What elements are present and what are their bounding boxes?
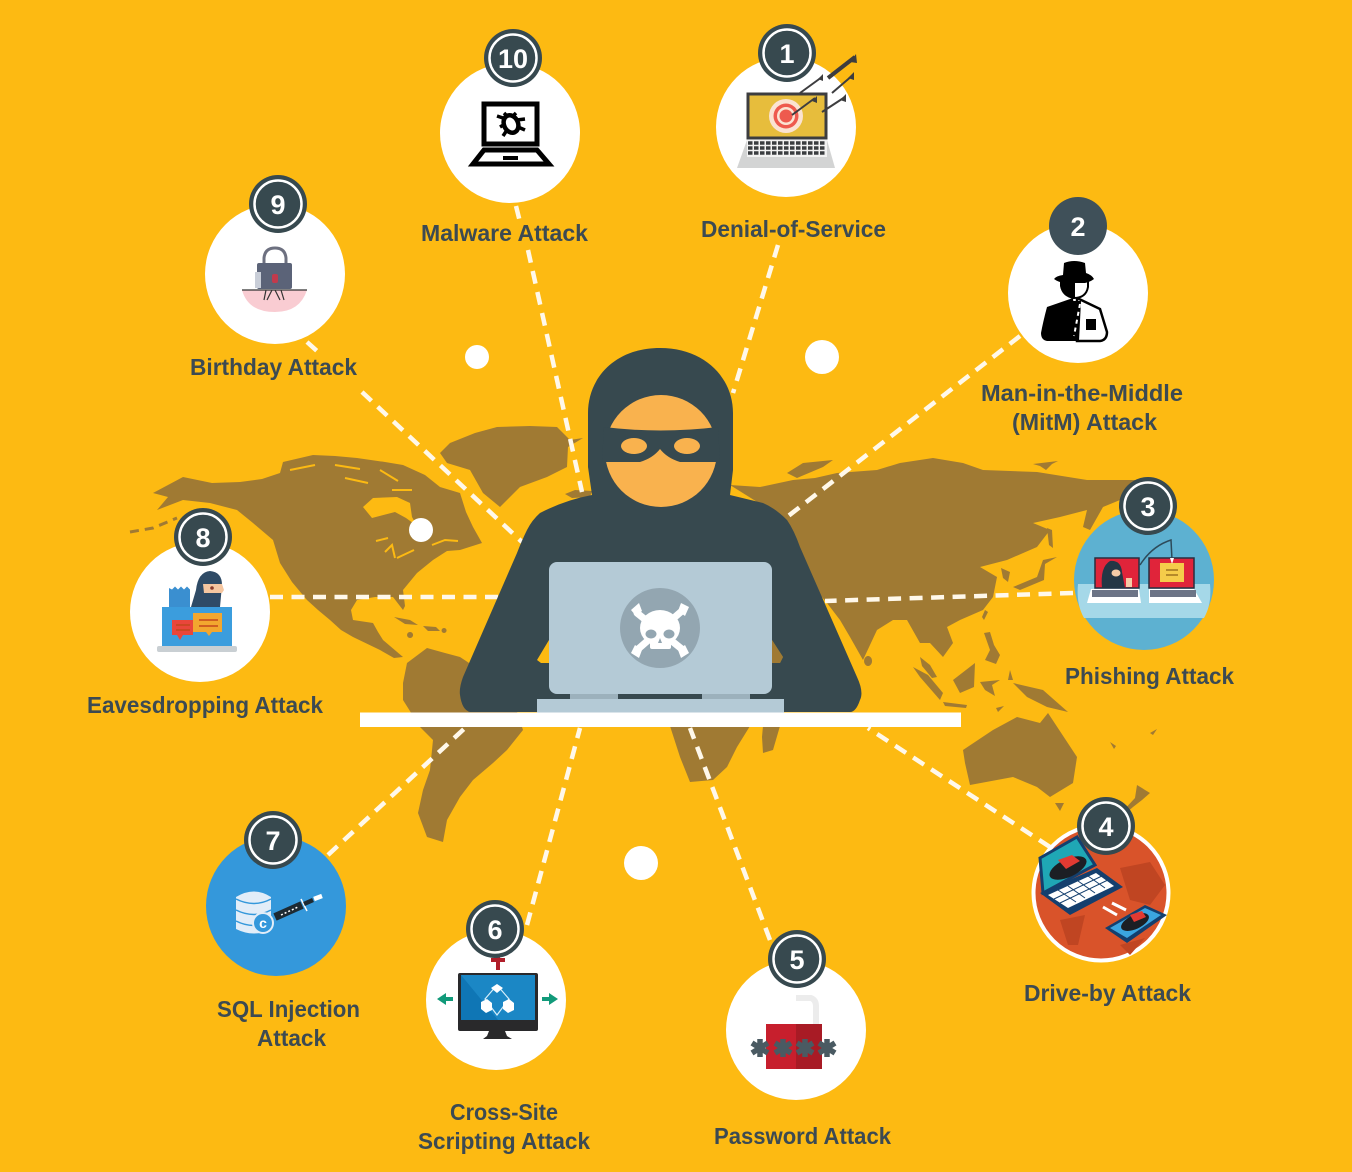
desk bar <box>360 712 961 727</box>
label: Attack <box>257 1025 326 1051</box>
icon: laptop and phone <box>1040 837 1167 943</box>
map: Australia <box>963 713 1077 797</box>
hacker: face <box>605 395 717 507</box>
badge <box>249 175 307 233</box>
hacker illustration <box>460 348 861 713</box>
map: Iceland <box>565 490 592 498</box>
connector: Cross-Site Scripting <box>527 728 580 925</box>
label: (MitM) Attack <box>1012 409 1157 435</box>
label: Drive-by Attack <box>1024 980 1191 1006</box>
connector: Password <box>690 728 770 940</box>
map: Novaya Zemlya <box>787 460 833 478</box>
icon: database and syringe: c <box>259 915 267 931</box>
continents <box>1060 862 1165 955</box>
laptop: skull badge <box>620 588 700 668</box>
circle <box>1034 826 1168 960</box>
map: Sri Lanka and Taiwan <box>864 610 988 666</box>
decorative dot <box>624 846 658 880</box>
icon: monitor with cubes <box>437 953 558 1039</box>
badge <box>768 930 826 988</box>
map: South-East Asia islands <box>913 632 1013 712</box>
label: Man-in-the-Middle <box>981 380 1183 406</box>
hacker: eye <box>674 438 700 454</box>
circle <box>205 204 345 344</box>
circle <box>1074 510 1214 650</box>
laptop: lid <box>549 562 772 694</box>
connector: Denial-of-Service <box>733 245 778 393</box>
decorative dot <box>805 340 839 374</box>
connector: Malware <box>516 206 582 492</box>
label <box>217 996 360 1051</box>
desk <box>1078 584 1210 618</box>
circle <box>426 930 566 1070</box>
connector: Phishing <box>825 593 1073 601</box>
laptop: base <box>537 699 784 713</box>
circle <box>726 960 866 1100</box>
connector: SQL Injection <box>328 728 465 855</box>
circle <box>1008 223 1148 363</box>
label: Phishing Attack <box>1065 663 1234 689</box>
label: Password Attack <box>714 1123 891 1149</box>
badge: 3 <box>1140 492 1156 522</box>
panel: 9 Birthday Attack <box>190 175 357 380</box>
hacker: hood and body <box>460 348 861 712</box>
badge <box>244 811 302 869</box>
circle <box>716 57 856 197</box>
icon: eavesdropper behind window <box>157 571 237 652</box>
circle <box>440 63 580 203</box>
map: Pacific islands <box>1110 729 1157 749</box>
badge: 2 <box>1070 212 1086 242</box>
map: New Guinea <box>1013 683 1068 712</box>
label <box>981 380 1183 435</box>
icon: padlock with asterisks <box>752 998 835 1069</box>
icon: laptop with bug <box>473 104 549 164</box>
badge: 10 <box>498 44 528 74</box>
badge <box>758 24 816 82</box>
map: Caribbean islands <box>394 617 447 638</box>
label <box>418 1099 590 1154</box>
label: Denial-of-Service <box>701 216 886 242</box>
panel: 7 SQL Injection Attack <box>206 811 360 1051</box>
panel: 2 Man-in-the-Middle (MitM) Attack <box>981 197 1183 435</box>
panel: 4 Drive-by Attack <box>1024 797 1191 1006</box>
icon: two phishing laptops <box>1087 540 1202 603</box>
badge <box>174 508 232 566</box>
badge <box>1077 797 1135 855</box>
connector: Eavesdropping <box>270 595 498 599</box>
hacker: mask <box>602 427 720 462</box>
decorative dot <box>409 518 433 542</box>
hacker: gaps between arms and laptop <box>772 640 783 663</box>
connector: Birthday <box>307 342 522 542</box>
label: Eavesdropping Attack <box>87 692 323 718</box>
connector: Man-in-the-Middle <box>787 336 1020 517</box>
panel: 5 Password Attack <box>714 930 891 1149</box>
map: Madagascar <box>762 726 780 753</box>
badge: 4 <box>1098 812 1114 842</box>
badge: 9 <box>270 190 286 220</box>
map: Africa <box>670 726 750 782</box>
badge: 7 <box>265 826 281 856</box>
badge: 5 <box>789 945 805 975</box>
map: Hudson Bay <box>363 497 417 526</box>
label: Malware Attack <box>421 220 588 246</box>
map: Tasmania <box>1055 803 1064 811</box>
map: Eurasia <box>730 458 1140 660</box>
connector: Drive-by <box>868 728 1050 847</box>
circle <box>130 542 270 682</box>
badge <box>1119 477 1177 535</box>
map: Japan and Korea <box>1001 528 1057 590</box>
map: South America <box>403 648 523 842</box>
panel: 6 Cross-Site Scripting Attack <box>418 900 590 1154</box>
map: Arctic channels and Great Lakes <box>290 465 458 558</box>
map: New Zealand <box>1118 785 1150 820</box>
hacker: left gap <box>537 640 549 663</box>
badge: 8 <box>195 523 211 553</box>
badge: 6 <box>487 915 503 945</box>
panel: 3 Phishing Attack <box>1065 477 1234 689</box>
map: North-east Siberian island <box>1033 461 1058 470</box>
laptop: hinge <box>702 694 750 700</box>
label: Scripting Attack <box>418 1128 590 1154</box>
icon: laptop with target <box>737 54 857 168</box>
hacker: eye <box>621 438 647 454</box>
icon: database and syringe <box>236 892 322 934</box>
map: Greenland <box>440 426 583 507</box>
icon: skull and crossbones <box>631 603 689 658</box>
badge <box>466 900 524 958</box>
world map <box>130 426 1157 842</box>
laptop: hinge <box>570 694 618 700</box>
map: Aleutian islands <box>130 518 177 532</box>
decorative dot <box>465 345 489 369</box>
badge: 1 <box>779 39 795 69</box>
map: North America <box>153 455 482 658</box>
circle <box>206 836 346 976</box>
badge <box>1049 197 1107 255</box>
label: Cross-Site <box>450 1099 558 1125</box>
panel: 10 Malware Attack <box>421 29 588 246</box>
badge <box>484 29 542 87</box>
panel: 8 Eavesdropping Attack <box>87 508 323 718</box>
label: Birthday Attack <box>190 354 357 380</box>
icon: spy <box>1041 261 1107 341</box>
icon: padlock on circuit <box>242 248 307 312</box>
panel: 1 Denial-of-Service <box>701 24 886 242</box>
label: SQL Injection <box>217 996 360 1022</box>
